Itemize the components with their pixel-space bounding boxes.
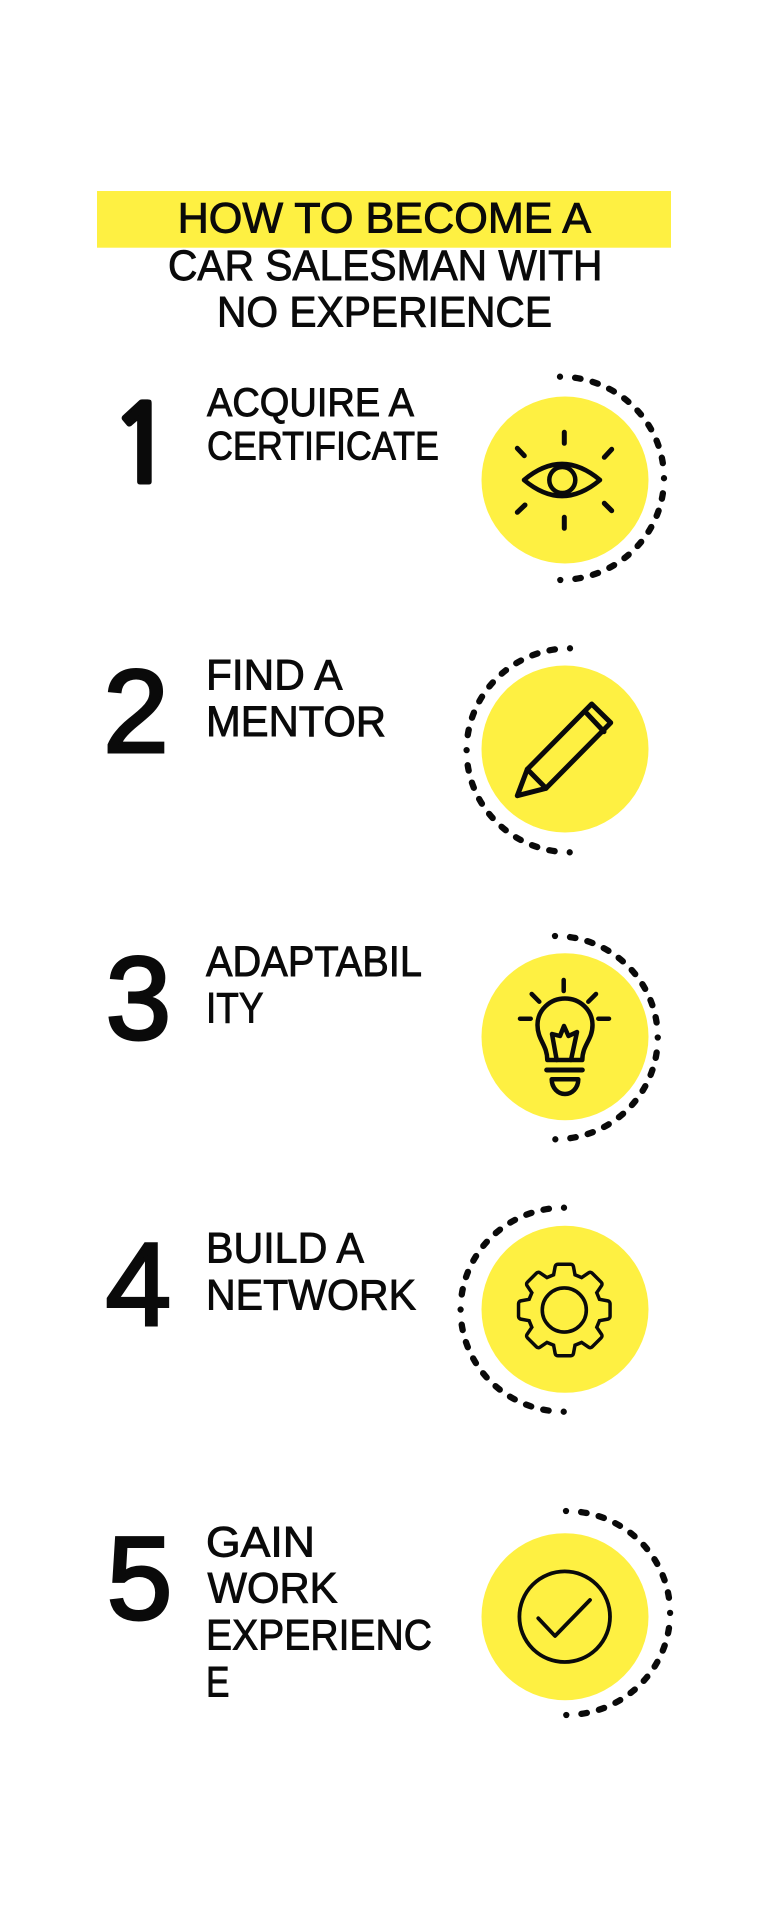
yellow circle 2 — [482, 666, 648, 832]
step 1 label: ACQUIRE A — [207, 381, 415, 425]
step 3 label: ITY — [206, 985, 264, 1033]
step 5 label: E — [206, 1659, 230, 1707]
icon: check mark — [519, 1571, 610, 1662]
step 5 label: GAIN — [206, 1519, 315, 1567]
dotted arc 1 — [560, 377, 664, 580]
dotted arc 2 — [467, 648, 570, 852]
step 2 label: MENTOR — [206, 698, 386, 746]
title — [97, 191, 671, 337]
step 1 label: CERTIFICATE — [207, 424, 439, 468]
icon: light bulb — [520, 980, 609, 1094]
yellow circle 5 — [482, 1533, 648, 1700]
step 4 label: BUILD A — [206, 1224, 364, 1272]
step 2: find a mentor — [103, 646, 648, 852]
number 4: 4 — [105, 1219, 171, 1351]
step 4 label: NETWORK — [206, 1271, 416, 1319]
step 3: adaptability — [106, 933, 658, 1139]
yellow circle 3 — [482, 953, 648, 1120]
number 1: 1 — [109, 392, 175, 500]
title highlight bar — [97, 191, 671, 248]
step 5 label: WORK — [208, 1565, 338, 1613]
step 5: gain work experience — [107, 1511, 670, 1715]
yellow circle 4 — [482, 1226, 648, 1393]
step 2 label: FIND A — [206, 651, 343, 699]
title line 3: NO EXPERIENCE — [217, 289, 552, 337]
step 1: acquire a certificate — [109, 377, 664, 580]
number 3: 3 — [106, 933, 171, 1065]
dotted arc 3 — [555, 936, 658, 1139]
step 3 label: ADAPTABIL — [206, 938, 422, 986]
icon: gear — [521, 1267, 607, 1353]
icon: pencil — [517, 704, 611, 796]
icon: eye — [517, 432, 612, 528]
step 5 label: EXPERIENC — [206, 1611, 432, 1659]
number 5: 5 — [107, 1513, 172, 1645]
dotted arc 4 — [461, 1208, 564, 1412]
title line 2: CAR SALESMAN WITH — [168, 242, 602, 290]
step 4: build a network — [105, 1208, 649, 1412]
title line 1: HOW TO BECOME A — [178, 195, 591, 243]
number 2: 2 — [103, 646, 169, 778]
dotted arc 5 — [566, 1511, 670, 1715]
yellow circle 1 — [482, 396, 648, 564]
